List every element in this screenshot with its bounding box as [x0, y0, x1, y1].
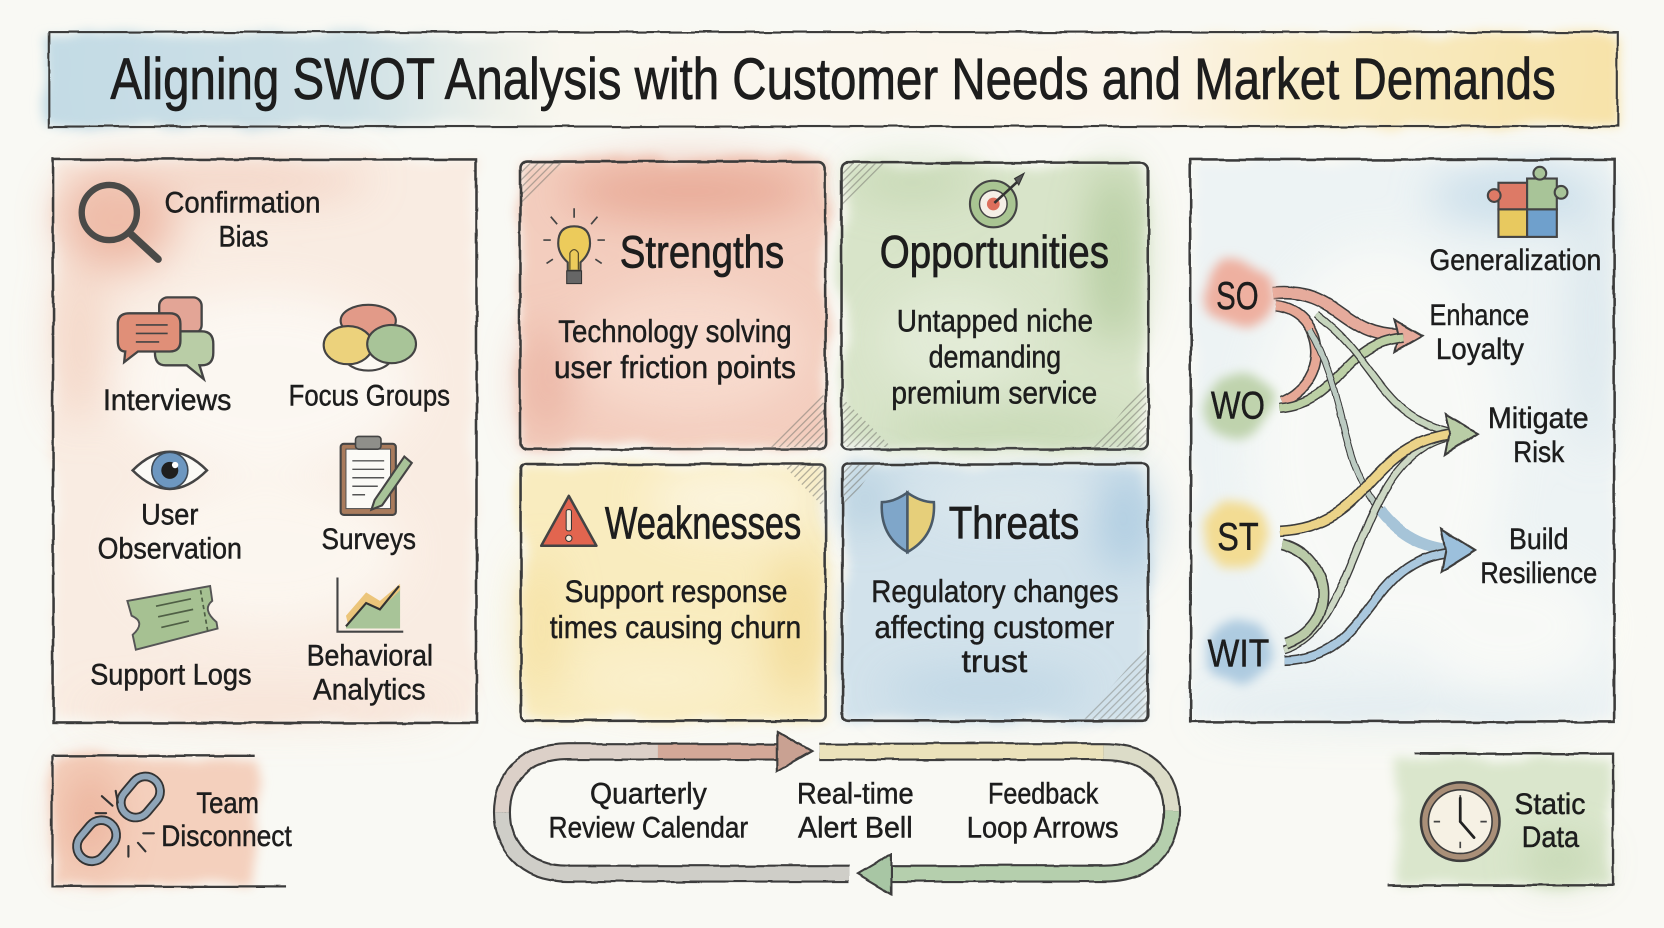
- arrow: SO to Mitigate Risk: [1316, 314, 1456, 433]
- label: behavioral analytics: [307, 640, 433, 707]
- label: behavioral analytics: Behavioral: [307, 640, 433, 673]
- icon: area chart: [337, 578, 403, 632]
- node: ST: ST: [1217, 515, 1259, 559]
- label: static data: Static: [1514, 788, 1586, 821]
- label: quarterly review calendar: Review Calendar: [549, 812, 748, 845]
- text: opportunities body: premium service: [891, 375, 1097, 411]
- label: user observation: Observation: [98, 532, 242, 565]
- label: behavioral analytics: Analytics: [313, 674, 426, 707]
- label: mitigate risk: Mitigate: [1488, 402, 1589, 435]
- text: strengths body: [554, 313, 796, 385]
- panel: research methods: [53, 159, 476, 723]
- node: SO: [1204, 262, 1270, 326]
- icon: shield: [882, 493, 934, 552]
- label: surveys: Surveys: [322, 523, 416, 556]
- label: mitigate risk: Risk: [1513, 436, 1564, 469]
- label: real-time alert bell: Real-time: [797, 778, 914, 811]
- loop band: [502, 731, 1172, 894]
- panel: strengths: [520, 159, 826, 449]
- text: opportunities body: [891, 302, 1097, 411]
- label: user observation: [98, 498, 242, 565]
- heading: opportunities: Opportunities: [880, 227, 1109, 278]
- label: enhance loyalty: Enhance: [1429, 299, 1529, 332]
- label: user observation: User: [141, 498, 199, 531]
- label: confirmation bias: [164, 186, 320, 253]
- icon: target with arrow: [970, 173, 1024, 227]
- label: generalization: Generalization: [1429, 244, 1601, 277]
- label: mitigate risk: [1488, 402, 1589, 469]
- label: build resilience: Build: [1509, 523, 1568, 556]
- icon: light bulb: [543, 208, 605, 284]
- text: opportunities body: Untapped niche: [897, 302, 1093, 338]
- label: enhance loyalty: Loyalty: [1436, 333, 1524, 366]
- label: feedback loop arrows: Feedback: [988, 778, 1098, 811]
- text: opportunities body: demanding: [929, 338, 1061, 374]
- text: threats body: [871, 573, 1119, 679]
- icon: eye: [133, 452, 207, 489]
- node: WO: WO: [1211, 383, 1265, 427]
- text: threats body: trust: [961, 643, 1027, 679]
- panel: weaknesses: [521, 464, 826, 721]
- arrow: SO to WO crescent: [1276, 306, 1316, 401]
- icon: puzzle: [1488, 167, 1567, 237]
- heading: strengths: Strengths: [620, 227, 784, 278]
- text: weaknesses body: Support response: [565, 573, 787, 609]
- feedback loop: [502, 731, 1172, 894]
- icon: clock: [1421, 782, 1500, 861]
- label: real-time alert bell: Alert Bell: [798, 812, 913, 845]
- label: build resilience: Resilience: [1480, 557, 1597, 590]
- icon: clipboard and pen: [341, 436, 412, 515]
- node: ST: [1203, 503, 1271, 567]
- label: confirmation bias: Confirmation: [164, 186, 320, 219]
- icon: magnifier: [82, 185, 158, 259]
- heading: threats: Threats: [949, 497, 1079, 548]
- label: quarterly review calendar: [549, 778, 748, 845]
- heading: weaknesses: Weaknesses: [605, 497, 801, 548]
- label: confirmation bias: Bias: [219, 220, 268, 253]
- text: threats body: Regulatory changes: [871, 573, 1119, 609]
- icon: focus groups: [324, 305, 416, 371]
- arrow: SO to Enhance Loyalty: [1273, 293, 1422, 352]
- title banner: [45, 32, 1619, 127]
- text: threats body: affecting customer: [874, 609, 1115, 645]
- panel: strategy flows: [1191, 159, 1614, 723]
- text: strengths body: Technology solving: [558, 313, 792, 349]
- label: team disconnect: [161, 787, 292, 853]
- arrow: WIT to Build Resilience: [1284, 529, 1475, 660]
- arrow: SO to Build Resilience: [1310, 329, 1452, 550]
- label: team disconnect: Team: [196, 787, 259, 820]
- label: focus groups: Focus Groups: [289, 380, 450, 413]
- label: feedback loop arrows: Loop Arrows: [967, 812, 1119, 845]
- label: enhance loyalty: [1429, 299, 1529, 366]
- panel: static data: [1388, 754, 1613, 885]
- arrow: WIT to Mitigate Risk: [1284, 435, 1456, 650]
- text: weaknesses body: times causing churn: [550, 609, 801, 645]
- arrow: ST to WIT crescent: [1282, 544, 1323, 643]
- label: static data: Data: [1522, 821, 1580, 854]
- label: team disconnect: Disconnect: [161, 820, 292, 853]
- label: feedback loop arrows: [967, 778, 1119, 845]
- panel: team disconnect: [52, 756, 292, 886]
- label: build resilience: [1480, 523, 1597, 590]
- arrow: WO to Enhance Loyalty: [1280, 338, 1403, 408]
- icon: ticket: [127, 586, 218, 650]
- flow arrows: [1273, 293, 1478, 660]
- label: static data: [1514, 788, 1586, 854]
- panel: opportunities: [842, 163, 1148, 449]
- node: SO: SO: [1216, 274, 1259, 318]
- label: interviews: Interviews: [103, 384, 231, 417]
- arrow: ST to Mitigate Risk: [1280, 414, 1478, 531]
- icon: broken chain: [71, 770, 166, 867]
- text: strengths body: user friction points: [554, 349, 796, 385]
- label: support logs: Support Logs: [90, 659, 252, 692]
- label: quarterly review calendar: Quarterly: [590, 778, 707, 811]
- panel: threats: [842, 464, 1150, 721]
- icon: warning triangle: [541, 496, 596, 546]
- node: WIT: WIT: [1208, 632, 1269, 676]
- node: WIT: [1204, 620, 1275, 684]
- label: real-time alert bell: [797, 778, 914, 845]
- node: WO: [1203, 372, 1271, 435]
- text: weaknesses body: [550, 573, 801, 645]
- icon: chat bubbles: [118, 297, 213, 379]
